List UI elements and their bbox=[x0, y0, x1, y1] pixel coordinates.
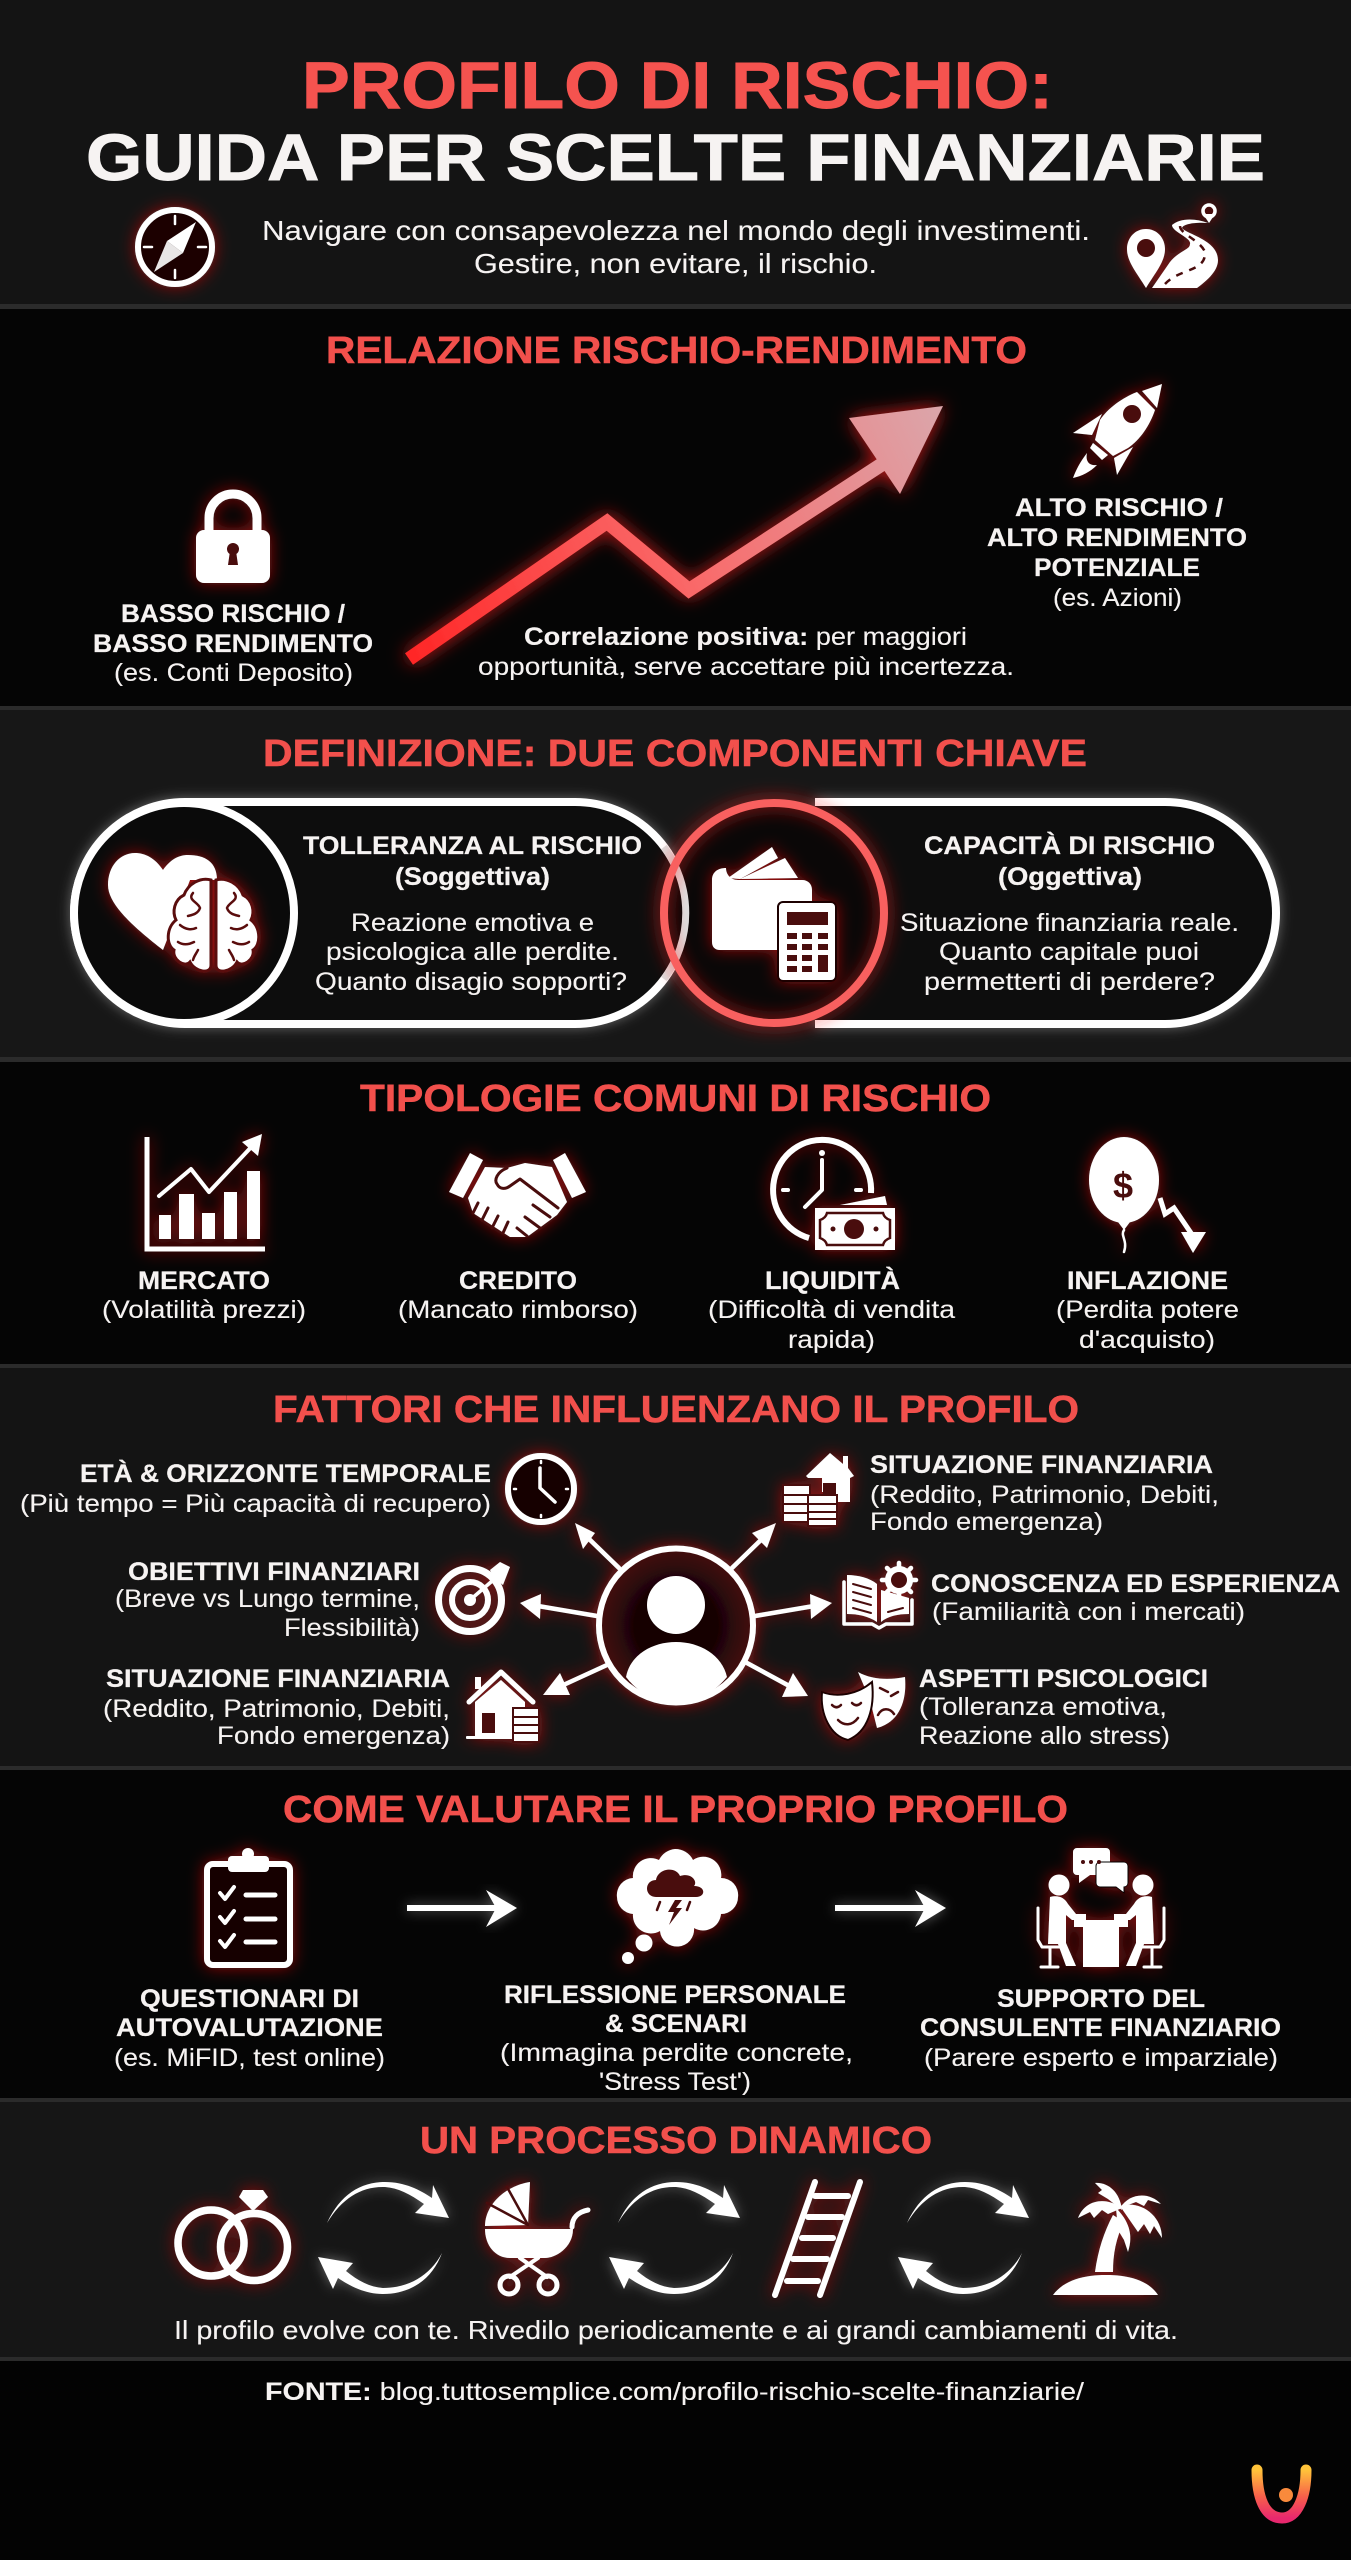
text: capacita: CAPACITÀ DI RISCHIO bbox=[924, 831, 1215, 860]
icon: clock bbox=[508, 1456, 574, 1522]
text: riflessione: & SCENARI bbox=[605, 2010, 747, 2038]
text: alto rischio bbox=[987, 494, 1247, 612]
text: mercato: MERCATO bbox=[138, 1267, 270, 1295]
text: mercato: (Volatilità prezzi) bbox=[102, 1296, 306, 1324]
icon: house with coins bbox=[467, 1672, 539, 1742]
text: conoscenza: (Familiarità con i mercati) bbox=[932, 1598, 1245, 1626]
arrow: step 2 to 3 bbox=[835, 1890, 946, 1927]
panel: footer bbox=[0, 2361, 1351, 2560]
text: mercato bbox=[102, 1267, 306, 1324]
icon: target bbox=[438, 1562, 510, 1632]
text: situazione right: Fondo emergenza) bbox=[870, 1508, 1103, 1536]
text: questionari: AUTOVALUTAZIONE bbox=[116, 2014, 383, 2042]
icon: theatre masks bbox=[822, 1672, 905, 1740]
text: capacita: permetterti di perdere? bbox=[924, 968, 1215, 996]
text: credito bbox=[398, 1267, 638, 1324]
title: PROFILO DI RISCHIO: bbox=[302, 48, 1053, 122]
text: obiettivi: Flessibilità) bbox=[284, 1614, 420, 1642]
factor: obiettivi bbox=[115, 1558, 510, 1642]
icon: market chart bbox=[147, 1134, 265, 1249]
icon: rocket bbox=[1073, 384, 1162, 478]
text: situazione right bbox=[870, 1451, 1219, 1536]
icon: cycle arrows 2 bbox=[609, 2182, 740, 2294]
text: liquidita bbox=[708, 1266, 955, 1354]
subtitle bbox=[262, 215, 1090, 279]
caption: Il profilo evolve con te. Rivedilo periodicamente e ai grandi cambiamenti di vita. bbox=[174, 2315, 1178, 2345]
source line: FONTE: blog.tuttosemplice.com/profilo-rischio-scelte-finanziarie/ bbox=[265, 2378, 1084, 2406]
icon: storm thought cloud bbox=[617, 1849, 738, 1964]
text: eta bbox=[20, 1459, 491, 1518]
text: riflessione: 'Stress Test') bbox=[599, 2068, 751, 2096]
text: situazione right: SITUAZIONE FINANZIARIA bbox=[870, 1451, 1213, 1479]
text: obiettivi: (Breve vs Lungo termine, bbox=[115, 1585, 420, 1613]
subtitle: Navigare con consapevolezza nel mondo degli investimenti. bbox=[262, 215, 1090, 246]
panel: processo dinamico bbox=[0, 2098, 1351, 2361]
pill: capacita di rischio bbox=[664, 802, 1276, 1024]
text: capacita: (Oggettiva) bbox=[998, 863, 1142, 891]
text: riflessione bbox=[500, 1981, 853, 2096]
text: liquidita: rapida) bbox=[788, 1326, 875, 1354]
text: riflessione: RIFLESSIONE PERSONALE bbox=[504, 1981, 846, 2009]
icon: handshake bbox=[449, 1153, 586, 1237]
icon: book and gear bbox=[844, 1563, 916, 1628]
text: questionari bbox=[114, 1985, 385, 2072]
text: obiettivi: OBIETTIVI FINANZIARI bbox=[128, 1558, 420, 1586]
text: situazione left bbox=[103, 1665, 450, 1750]
text: alto rischio: (es. Azioni) bbox=[1053, 584, 1182, 612]
pill: tolleranza al rischio bbox=[74, 802, 686, 1024]
text: questionari: QUESTIONARI DI bbox=[140, 1985, 359, 2013]
text: aspetti: (Tolleranza emotiva, bbox=[919, 1693, 1167, 1721]
item: liquidita bbox=[708, 1140, 955, 1354]
text: questionari: (es. MiFID, test online) bbox=[114, 2044, 385, 2072]
heading: DEFINIZIONE: DUE COMPONENTI CHIAVE bbox=[263, 733, 1087, 775]
text: liquidita: LIQUIDITÀ bbox=[765, 1266, 900, 1295]
text: tolleranza: Reazione emotiva e bbox=[351, 909, 594, 937]
text: eta: (Più tempo = Più capacità di recupero) bbox=[20, 1490, 491, 1518]
icon: clipboard bbox=[207, 1848, 290, 1965]
title bbox=[86, 48, 1265, 194]
text: eta: ETÀ & ORIZZONTE TEMPORALE bbox=[80, 1459, 491, 1488]
text: basso rischio: BASSO RENDIMENTO bbox=[93, 630, 373, 658]
panel: header bbox=[0, 0, 1351, 309]
heading: RELAZIONE RISCHIO-RENDIMENTO bbox=[326, 330, 1027, 372]
arrow: rising risk-return line bbox=[409, 406, 943, 659]
heading: TIPOLOGIE COMUNI DI RISCHIO bbox=[360, 1078, 991, 1120]
icon: wallet and calculator bbox=[712, 847, 836, 981]
panel: relazione rischio-rendimento bbox=[0, 309, 1351, 708]
item: inflazione bbox=[1056, 1137, 1239, 1354]
icon: house and coins bbox=[783, 1453, 854, 1526]
text: inflazione bbox=[1056, 1267, 1239, 1354]
icon: meeting with advisor bbox=[1038, 1848, 1164, 1967]
text: riflessione: (Immagina perdite concrete, bbox=[500, 2039, 853, 2067]
heading: COME VALUTARE IL PROPRIO PROFILO bbox=[283, 1789, 1068, 1831]
text: correlazione positiva: opportunità, serve accettare più incertezza. bbox=[478, 653, 1014, 681]
text: capacita: Quanto capitale puoi bbox=[939, 938, 1199, 966]
text: tolleranza: (Soggettiva) bbox=[395, 863, 550, 891]
subtitle: Gestire, non evitare, il rischio. bbox=[474, 248, 877, 279]
icon: logo bbox=[1257, 2470, 1306, 2518]
text: correlazione positiva: Correlazione positiva: per maggiori bbox=[524, 623, 967, 651]
panel: come valutare bbox=[0, 1766, 1351, 2100]
factor: eta bbox=[20, 1456, 574, 1522]
text: alto rischio: ALTO RENDIMENTO bbox=[987, 524, 1247, 552]
title: GUIDA PER SCELTE FINANZIARIE bbox=[86, 120, 1265, 194]
text: credito: (Mancato rimborso) bbox=[398, 1296, 638, 1324]
text: tolleranza bbox=[303, 832, 642, 996]
text: supporto: (Parere esperto e imparziale) bbox=[924, 2044, 1278, 2072]
heading: FATTORI CHE INFLUENZANO IL PROFILO bbox=[273, 1389, 1079, 1431]
icon: palm on island bbox=[1053, 2183, 1162, 2295]
text: supporto: CONSULENTE FINANZIARIO bbox=[920, 2014, 1281, 2042]
text: conoscenza: CONOSCENZA ED ESPERIENZA bbox=[931, 1570, 1340, 1598]
text: basso rischio bbox=[93, 600, 373, 687]
text: supporto: SUPPORTO DEL bbox=[997, 1985, 1205, 2013]
icon: cycle arrows 1 bbox=[318, 2182, 449, 2294]
text: basso rischio: (es. Conti Deposito) bbox=[114, 659, 353, 687]
text: conoscenza bbox=[931, 1570, 1340, 1626]
text: liquidita: (Difficoltà di vendita bbox=[708, 1296, 955, 1324]
step: supporto bbox=[920, 1848, 1281, 2072]
panel: fattori bbox=[0, 1364, 1351, 1768]
text: aspetti: ASPETTI PSICOLOGICI bbox=[919, 1665, 1208, 1693]
text: capacita bbox=[900, 831, 1239, 996]
step: questionari bbox=[114, 1848, 385, 2072]
hub: person with arrows bbox=[520, 1523, 832, 1702]
icon: wedding rings bbox=[178, 2190, 288, 2280]
text: inflazione: INFLAZIONE bbox=[1067, 1267, 1228, 1295]
text: situazione right: (Reddito, Patrimonio, Debiti, bbox=[870, 1481, 1219, 1509]
factor: aspetti psicologici bbox=[822, 1665, 1208, 1750]
text: inflazione: (Perdita potere bbox=[1056, 1296, 1239, 1324]
text: situazione left: (Reddito, Patrimonio, Debiti, bbox=[103, 1695, 450, 1723]
icon: ladder bbox=[775, 2182, 860, 2295]
icon: cycle arrows 3 bbox=[898, 2182, 1029, 2294]
text: credito: CREDITO bbox=[459, 1267, 577, 1295]
text: alto rischio: POTENZIALE bbox=[1034, 554, 1200, 582]
text: situazione left: Fondo emergenza) bbox=[217, 1722, 450, 1750]
icon: compass bbox=[138, 210, 212, 284]
panel: definizione bbox=[0, 706, 1351, 1060]
text: aspetti: Reazione allo stress) bbox=[919, 1722, 1170, 1750]
text: tolleranza: Quanto disagio sopporti? bbox=[315, 968, 627, 996]
icon: heart and brain bbox=[108, 853, 259, 971]
text: correlazione positiva bbox=[478, 623, 1014, 681]
item: credito bbox=[398, 1153, 638, 1324]
text: supporto bbox=[920, 1985, 1281, 2072]
icon: lock bbox=[196, 494, 270, 583]
icon: balloon: $ bbox=[1113, 1165, 1133, 1206]
icon: baby stroller bbox=[485, 2182, 588, 2294]
factor: conoscenza bbox=[844, 1563, 1340, 1628]
icon: balloon bbox=[1089, 1137, 1206, 1253]
arrow: step 1 to 2 bbox=[407, 1890, 517, 1927]
heading: UN PROCESSO DINAMICO bbox=[420, 2120, 932, 2162]
text: situazione left: SITUAZIONE FINANZIARIA bbox=[106, 1665, 450, 1693]
icon: map road bbox=[1127, 205, 1218, 288]
text: obiettivi bbox=[115, 1558, 420, 1642]
factor: situazione finanziaria right bbox=[783, 1451, 1219, 1536]
text: alto rischio: ALTO RISCHIO / bbox=[1015, 494, 1223, 522]
text: aspetti bbox=[919, 1665, 1208, 1750]
text: capacita: Situazione finanziaria reale. bbox=[900, 909, 1239, 937]
text: basso rischio: BASSO RISCHIO / bbox=[121, 600, 345, 628]
step: riflessione bbox=[500, 1849, 853, 2096]
text: inflazione: d'acquisto) bbox=[1079, 1326, 1215, 1354]
factor: situazione finanziaria left bbox=[103, 1665, 539, 1750]
panel: tipologie bbox=[0, 1057, 1351, 1366]
text: tolleranza: psicologica alle perdite. bbox=[326, 938, 619, 966]
icon: clock and money bbox=[773, 1140, 895, 1250]
item: mercato bbox=[102, 1134, 306, 1324]
text: tolleranza: TOLLERANZA AL RISCHIO bbox=[303, 832, 642, 860]
